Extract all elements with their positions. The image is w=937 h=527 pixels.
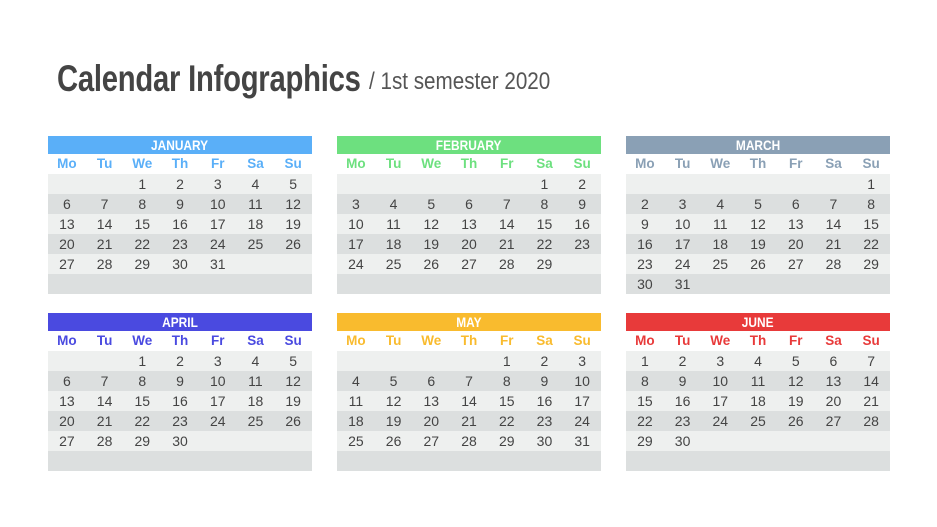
panel: March: MARCH [736, 137, 780, 153]
panel: June: Fr [789, 333, 802, 348]
panel: January: Tu [97, 156, 112, 171]
panel: January: 12 [285, 196, 301, 212]
panel: February: 11 [386, 216, 401, 232]
panel: June: 24 [712, 413, 728, 429]
panel: April: APRIL [162, 314, 198, 330]
panel: March: 31 [675, 276, 690, 292]
panel: April: Th [172, 333, 188, 348]
panel: March: Tu [675, 156, 690, 171]
panel: January: 8 [138, 196, 146, 212]
panel: May: 23 [537, 413, 552, 429]
panel: March: Th [750, 156, 766, 171]
panel: April: Fr [211, 333, 224, 348]
panel: March: 7 [830, 196, 837, 212]
panel: January: Fr [211, 156, 224, 171]
panel: April: 16 [172, 393, 188, 409]
panel: February: 27 [461, 256, 477, 272]
panel: March: 27 [788, 256, 804, 272]
panel: June: 25 [750, 413, 766, 429]
panel: February: 18 [386, 236, 401, 252]
panel: June: 2 [679, 353, 686, 369]
panel: February: 28 [499, 256, 515, 272]
panel: April: 13 [59, 393, 75, 409]
panel: April: 23 [172, 413, 188, 429]
panel: May: 19 [386, 413, 401, 429]
panel: April: 21 [97, 413, 112, 429]
panel: March: 24 [675, 256, 690, 272]
panel: June: 4 [754, 353, 762, 369]
panel: May: 26 [386, 433, 401, 449]
panel: January: 14 [97, 216, 112, 232]
panel: March: 12 [750, 216, 766, 232]
panel: March: 28 [826, 256, 841, 272]
panel: May: 29 [499, 433, 515, 449]
panel: January: 2 [176, 176, 184, 192]
panel: June: Tu [675, 333, 690, 348]
panel: April: 27 [59, 433, 75, 449]
panel: February: FEBRUARY [436, 137, 502, 153]
panel: January [48, 136, 312, 294]
panel: June: 22 [637, 413, 653, 429]
panel: June: 11 [751, 373, 765, 389]
panel: February: Mo [346, 156, 366, 171]
title: Calendar Infographics [57, 58, 361, 99]
panel: April: 11 [248, 373, 263, 389]
panel: May: 2 [541, 353, 548, 369]
panel: March: 25 [712, 256, 728, 272]
panel: April: 22 [134, 413, 150, 429]
panel: January: Mo [57, 156, 77, 171]
panel: January: 19 [285, 216, 301, 232]
panel: June: 23 [675, 413, 690, 429]
panel: May: 30 [537, 433, 552, 449]
panel: April: 20 [59, 413, 75, 429]
panel: June: 27 [826, 413, 841, 429]
panel: March: Sa [825, 156, 842, 171]
panel: May: 12 [386, 393, 401, 409]
panel: April: 12 [285, 373, 301, 389]
panel: May: 10 [574, 373, 590, 389]
panel: June: Th [750, 333, 766, 348]
panel: March: 4 [716, 196, 724, 212]
text: / 1st semester 2020 [369, 68, 550, 95]
panel: March [626, 136, 890, 294]
panel: January: 16 [172, 216, 188, 232]
panel: January: 3 [214, 176, 222, 192]
panel: June: Su [863, 333, 880, 348]
panel: May: 28 [461, 433, 477, 449]
panel: April: Su [285, 333, 302, 348]
panel: February: 16 [574, 216, 590, 232]
panel: May: MAY [456, 314, 482, 330]
panel: June: 28 [863, 413, 879, 429]
panel: April: 17 [210, 393, 226, 409]
panel: January: 9 [176, 196, 184, 212]
panel: March: 26 [750, 256, 766, 272]
panel: May: 27 [424, 433, 439, 449]
panel: June: We [710, 333, 730, 348]
panel: June: Sa [825, 333, 842, 348]
panel: June: 7 [867, 353, 875, 369]
panel: May: 15 [499, 393, 515, 409]
panel: February: 21 [499, 236, 515, 252]
panel: January: 10 [210, 196, 226, 212]
panel: January: 4 [252, 176, 259, 192]
panel: June: 8 [641, 373, 649, 389]
panel: April: Sa [247, 333, 264, 348]
panel: February: Fr [500, 156, 513, 171]
panel: January: 30 [172, 256, 188, 272]
panel: April: 29 [134, 433, 150, 449]
panel: May: We [421, 333, 441, 348]
panel: March: Mo [635, 156, 655, 171]
panel: June: 9 [679, 373, 686, 389]
panel: June: 18 [750, 393, 766, 409]
panel: June: 12 [788, 373, 804, 389]
panel: February: 26 [424, 256, 439, 272]
panel: February: 4 [390, 196, 397, 212]
panel: February: 8 [541, 196, 548, 212]
panel: May: 31 [574, 433, 590, 449]
panel: June: 1 [641, 353, 649, 369]
panel: January: 27 [59, 256, 75, 272]
panel: January: Su [285, 156, 302, 171]
panel: April: 10 [210, 373, 226, 389]
panel: March: 10 [675, 216, 690, 232]
panel: January: 29 [134, 256, 150, 272]
panel: January: 17 [210, 216, 226, 232]
panel: April: 18 [248, 393, 263, 409]
panel: February: We [421, 156, 441, 171]
panel: May: Th [461, 333, 477, 348]
panel: March: 19 [750, 236, 766, 252]
panel: February: 5 [427, 196, 435, 212]
panel: March: 22 [863, 236, 879, 252]
panel: June: 13 [826, 373, 841, 389]
panel: April: 14 [97, 393, 112, 409]
panel: April: 26 [285, 413, 301, 429]
panel: February: 10 [348, 216, 364, 232]
panel: March: 8 [867, 196, 875, 212]
panel: March: 13 [788, 216, 804, 232]
panel: June: 29 [637, 433, 653, 449]
panel: May: 25 [348, 433, 364, 449]
panel: June: 5 [792, 353, 800, 369]
panel: February: Th [461, 156, 477, 171]
panel: March: 5 [754, 196, 762, 212]
panel: May: 9 [541, 373, 548, 389]
panel: February: 7 [503, 196, 511, 212]
panel: January: JANUARY [151, 137, 209, 153]
panel: January: 21 [97, 236, 112, 252]
panel: May: 3 [578, 353, 586, 369]
panel: February: 1 [541, 176, 548, 192]
panel: March: Su [863, 156, 880, 171]
panel: February: 6 [465, 196, 473, 212]
panel: April [48, 313, 312, 471]
panel: January: Sa [247, 156, 264, 171]
panel: May: 13 [424, 393, 439, 409]
panel: May: 22 [499, 413, 515, 429]
panel: June: 19 [788, 393, 804, 409]
panel: January: 18 [248, 216, 263, 232]
panel: February: Su [574, 156, 591, 171]
panel: March: 20 [788, 236, 804, 252]
panel: January: 20 [59, 236, 75, 252]
panel: June: 15 [637, 393, 653, 409]
panel: June [626, 313, 890, 471]
panel: March: 2 [641, 196, 649, 212]
panel: May: 8 [503, 373, 511, 389]
panel: May: 4 [352, 373, 360, 389]
panel: March: 3 [679, 196, 686, 212]
panel: March: 9 [641, 216, 649, 232]
panel: April: 7 [101, 373, 108, 389]
panel: February: 2 [578, 176, 586, 192]
panel: June: 30 [675, 433, 690, 449]
panel: May: Fr [500, 333, 513, 348]
panel: January: 23 [172, 236, 188, 252]
panel: February: 17 [348, 236, 364, 252]
panel: April: 30 [172, 433, 188, 449]
panel: April: 25 [248, 413, 263, 429]
panel: January: 24 [210, 236, 226, 252]
panel: May: 1 [503, 353, 511, 369]
panel: January: 13 [59, 216, 75, 232]
panel: June: 20 [826, 393, 841, 409]
panel: May: 18 [348, 413, 364, 429]
panel: January: 6 [63, 196, 71, 212]
panel: April: 19 [285, 393, 301, 409]
panel: April: 15 [134, 393, 150, 409]
panel: June: 6 [830, 353, 837, 369]
panel: April: 2 [176, 353, 184, 369]
panel: February: 14 [499, 216, 515, 232]
panel: February: 25 [386, 256, 401, 272]
panel: May: Tu [386, 333, 401, 348]
panel: January: 25 [248, 236, 263, 252]
panel: March: 29 [863, 256, 879, 272]
panel: June: 21 [863, 393, 879, 409]
panel: March: 30 [637, 276, 653, 292]
panel: May: 17 [574, 393, 590, 409]
panel: May: Mo [346, 333, 366, 348]
panel: April: Tu [97, 333, 112, 348]
panel: March: 6 [792, 196, 800, 212]
panel: May: 16 [537, 393, 552, 409]
title [57, 58, 550, 99]
panel: February: 29 [537, 256, 552, 272]
panel: March: Fr [789, 156, 802, 171]
panel: May: 11 [349, 393, 363, 409]
panel: May: 5 [390, 373, 397, 389]
panel: January: 1 [138, 176, 146, 192]
panel: April: 24 [210, 413, 226, 429]
panel: April: We [132, 333, 152, 348]
panel: May: 7 [465, 373, 473, 389]
panel: March: 23 [637, 256, 653, 272]
panel: May: 20 [424, 413, 439, 429]
panel: February: 3 [352, 196, 360, 212]
panel: February: 20 [461, 236, 477, 252]
panel: January: 11 [248, 196, 263, 212]
panel: March: 14 [826, 216, 841, 232]
panel: April: 3 [214, 353, 222, 369]
panel: June: 14 [863, 373, 879, 389]
panel: January: 26 [285, 236, 301, 252]
panel: February: 24 [348, 256, 364, 272]
panel: February: 19 [424, 236, 439, 252]
panel: March: We [710, 156, 730, 171]
panel: January: Th [172, 156, 188, 171]
panel: February: 13 [461, 216, 477, 232]
panel: April: 4 [252, 353, 259, 369]
panel: March: 21 [826, 236, 841, 252]
panel: January: 5 [289, 176, 297, 192]
panel: April: 8 [138, 373, 146, 389]
panel: March: 18 [712, 236, 728, 252]
panel: February: Tu [386, 156, 401, 171]
panel: March: 15 [863, 216, 879, 232]
panel: June: 10 [712, 373, 728, 389]
panel: May [337, 313, 601, 471]
panel: April: 6 [63, 373, 71, 389]
panel: April: 1 [138, 353, 146, 369]
panel: January: 15 [134, 216, 150, 232]
panel: June: Mo [635, 333, 655, 348]
panel: March: 11 [713, 216, 728, 232]
panel: May: 21 [461, 413, 477, 429]
panel: June: 3 [716, 353, 724, 369]
panel: March: 1 [867, 176, 875, 192]
panel: March: 16 [637, 236, 653, 252]
panel: January: 28 [97, 256, 112, 272]
panel: February: 9 [578, 196, 586, 212]
panel: February: 12 [424, 216, 439, 232]
panel: January: 7 [101, 196, 108, 212]
panel: April: 9 [176, 373, 184, 389]
panel: February: 15 [537, 216, 552, 232]
panel: May: 24 [574, 413, 590, 429]
panel: May: 14 [461, 393, 477, 409]
panel: February [337, 136, 601, 294]
panel: January: 22 [134, 236, 150, 252]
panel: June: 16 [675, 393, 690, 409]
panel: February: 23 [574, 236, 590, 252]
panel: March: 17 [675, 236, 690, 252]
panel: June: 17 [712, 393, 728, 409]
panel: June: JUNE [742, 314, 774, 330]
panel: May: 6 [427, 373, 435, 389]
panel: February: Sa [536, 156, 553, 171]
panel: May: Sa [536, 333, 553, 348]
panel: January: 31 [210, 256, 226, 272]
panel: May: Su [574, 333, 591, 348]
panel: April: Mo [57, 333, 77, 348]
panel: February: 22 [537, 236, 552, 252]
panel: April: 28 [97, 433, 112, 449]
panel: April: 5 [289, 353, 297, 369]
panel: January: We [132, 156, 152, 171]
panel: June: 26 [788, 413, 804, 429]
